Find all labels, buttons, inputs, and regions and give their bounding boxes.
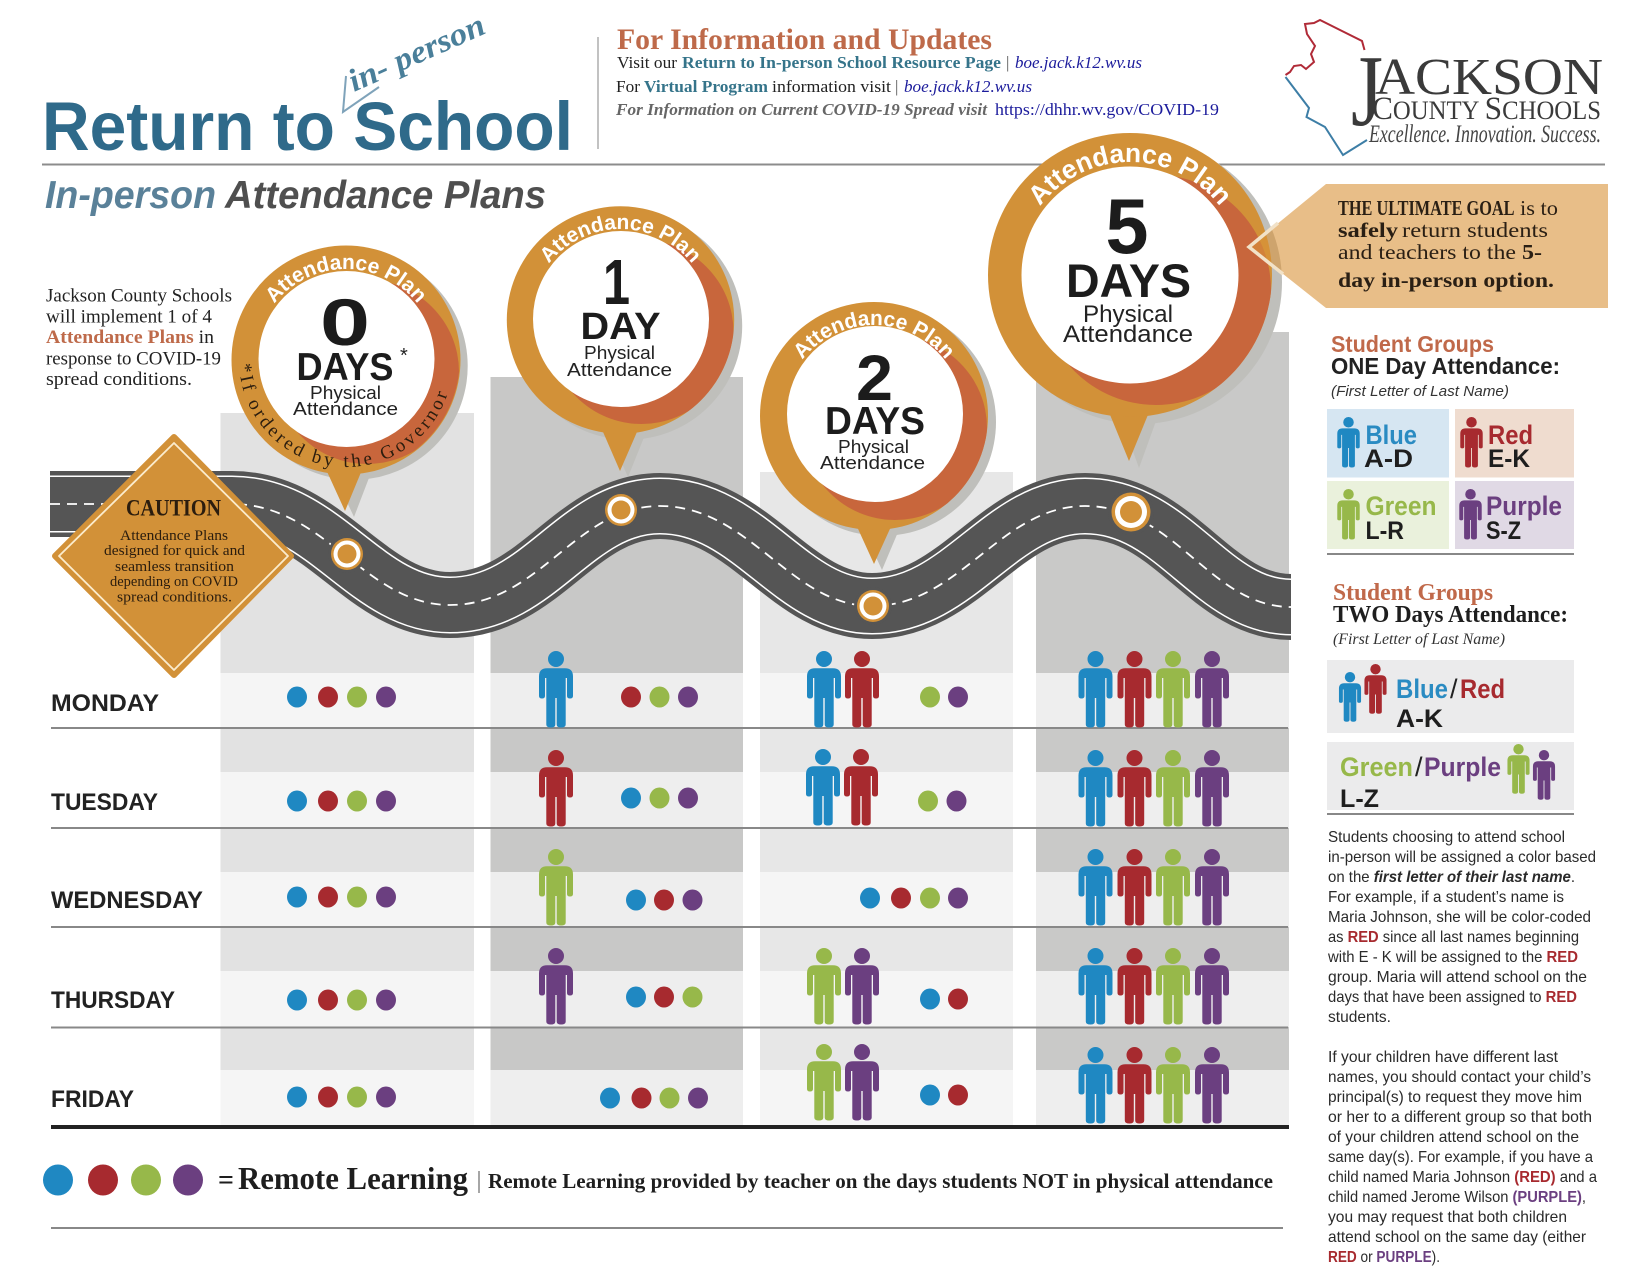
caution text: [104, 528, 246, 606]
info line: resource page: boe.jack.k12.wv.us: [1015, 53, 1142, 72]
plan pin: 0 days: DAYS: [296, 346, 394, 389]
plan pin: 0 days: Attendance: [293, 399, 398, 419]
day rules: [51, 728, 1289, 1127]
panel: student groups one day: [1327, 331, 1574, 549]
group: green and purple: Green: [1340, 752, 1413, 782]
group: green: Green: [1366, 491, 1436, 521]
ultimate goal callout: THE ULTIMATE GOAL: [1338, 196, 1514, 220]
group: purple: S-Z: [1486, 517, 1521, 545]
big number 2: 2: [856, 342, 893, 414]
plan pin: 1 day: [506, 206, 742, 477]
group: green and purple: /: [1415, 752, 1423, 782]
road marker: 5 days: [1108, 489, 1154, 535]
info line: covid spread: [615, 100, 1219, 119]
info line: covid spread: https://dhhr.wv.gov/COVID-19: [995, 100, 1219, 119]
explanatory text: color assignment: Maria Johnson, she will be color-coded: [1328, 909, 1591, 926]
plan pin: 5 days: Attendance: [1063, 321, 1193, 348]
day labels: TUESDAY: [51, 789, 158, 816]
county map outline: [1286, 20, 1364, 75]
day labels: [51, 690, 203, 1113]
explanatory text: different last names: RED or PURPLE).: [1328, 1249, 1440, 1266]
group: green: L-R: [1366, 517, 1404, 545]
subtitle: In-person Attendance Plans: [45, 174, 546, 217]
plan pin: 5 days: DAYS: [1066, 254, 1191, 307]
logo: Jackson County Schools: [1286, 20, 1603, 155]
group: blue: Blue: [1366, 420, 1417, 450]
group: blue and red: /: [1450, 674, 1458, 704]
plan pin: 1 day: DAY: [580, 306, 660, 348]
group: blue and red: Red: [1460, 674, 1505, 704]
explanatory text: color assignment: on the first letter of their last name.: [1328, 869, 1575, 886]
explanatory text: different last names: you may request that both children: [1328, 1209, 1567, 1226]
people: 5 days column: [1078, 651, 1229, 1124]
big number 0: 0: [320, 285, 370, 359]
ring label: Attendance Plan: [796, 312, 952, 360]
intro text: response to COVID-19: [46, 348, 221, 370]
info line: virtual program: [616, 77, 1032, 96]
ring note: governor order: *If ordered by the Governor: [240, 364, 447, 470]
road marker: 2 days: [854, 587, 892, 625]
day labels: THURSDAY: [51, 987, 175, 1014]
explanatory text: color assignment: as RED since all last names beginning: [1328, 929, 1579, 946]
caution text: spread conditions.: [117, 590, 232, 606]
explanatory text: different last names: or her to a different group so that both: [1328, 1109, 1592, 1126]
explanatory text: color assignment: students.: [1328, 1009, 1391, 1026]
panel: student groups two days: [1327, 580, 1574, 813]
subtitle: In-person Attendance Plans: In-person: [45, 174, 216, 217]
group: green: [1327, 481, 1449, 549]
people: 1 day column: [539, 651, 573, 1024]
group: blue and red: [1327, 660, 1574, 733]
explanatory text: color assignment: with E - K will be assigned to the RED: [1327, 949, 1578, 966]
intro text: spread conditions.: [46, 369, 192, 390]
caret mark: [343, 76, 379, 112]
plan pin: 1 day: Attendance: [567, 360, 672, 380]
heading: ONE Day Attendance:: [1331, 353, 1560, 379]
info line: resource page: Return to In-person School Resource Page: [682, 53, 1001, 72]
big number 5: 5: [1106, 182, 1148, 270]
caution heading: CAUTION: [126, 496, 221, 520]
plan pin: 1 day: Physical: [584, 342, 655, 363]
plan pin: 5 days: Physical: [1083, 301, 1173, 328]
plan pin: 2 days: Physical: [838, 436, 909, 457]
ultimate goal callout: return students: [1402, 218, 1548, 242]
group: purple: Purple: [1486, 491, 1562, 521]
day labels: MONDAY: [51, 690, 159, 717]
explanatory text: different last names: of your children attend school on the: [1328, 1129, 1579, 1146]
info line: resource page: Visit our: [617, 53, 677, 72]
info line: resource page: |: [1006, 53, 1009, 72]
column backgrounds: [220, 332, 1289, 1127]
plan pin: 0 days: Physical: [310, 382, 381, 403]
info line: virtual program: boe.jack.k12.wv.us: [904, 77, 1032, 96]
group: red: Red: [1488, 420, 1533, 450]
remote learning legend: Remote Learning: [238, 1160, 468, 1196]
ring label: Attendance Plan: [268, 256, 424, 304]
ultimate goal callout: day in-person option.: [1338, 268, 1554, 292]
info line: virtual program: For: [616, 77, 640, 96]
logo: Jackson County Schools: J: [1351, 35, 1383, 148]
info line: virtual program: |: [895, 77, 898, 96]
plan pin: 2 days: DAYS: [825, 400, 925, 443]
group: blue: A-D: [1364, 445, 1413, 473]
subtitle: In-person Attendance Plans: Attendance Plans: [224, 174, 546, 217]
explanatory text: color assignment: [1327, 829, 1596, 1026]
group: blue and red: Blue: [1396, 674, 1448, 704]
road marker: 1 day: [602, 491, 640, 529]
remote learning legend: Remote Learning provided by teacher on the days students NOT in physical attendance: [488, 1169, 1273, 1193]
explanatory text: different last names: If your children have different last: [1328, 1049, 1559, 1066]
remote dots: 2 days column: [860, 686, 968, 1106]
info line: virtual program: information visit: [772, 77, 891, 96]
big number 1: 1: [603, 246, 630, 318]
caution text: depending on COVID: [110, 574, 238, 590]
explanatory text: different last names: principal(s) to request they move him: [1328, 1089, 1582, 1106]
explanatory text: color assignment: days that have been assigned to RED: [1328, 989, 1577, 1006]
heading: Student Groups: [1333, 580, 1493, 606]
handwritten insert: in-person: in- person: [342, 6, 490, 98]
heading: [1331, 331, 1560, 400]
group: green and purple: Purple: [1424, 752, 1501, 782]
explanatory text: color assignment: group. Maria will attend school on the: [1328, 969, 1587, 986]
heading: TWO Days Attendance:: [1333, 602, 1568, 628]
explanatory text: different last names: [1328, 1049, 1597, 1266]
information and updates block: [615, 23, 1219, 119]
ultimate goal callout: is to: [1520, 196, 1558, 220]
remote learning legend: =: [218, 1165, 234, 1196]
intro text: will implement 1 of 4: [46, 306, 212, 328]
plan pin: 2 days: Attendance: [820, 453, 925, 473]
day labels: WEDNESDAY: [51, 887, 203, 914]
remote learning legend: [43, 1160, 1273, 1196]
explanatory text: color assignment: For example, if a student’s name is: [1328, 889, 1564, 906]
explanatory text: different last names: names, you should contact your child’s: [1328, 1069, 1591, 1086]
day labels: FRIDAY: [51, 1086, 134, 1113]
explanatory text: different last names: child named Jerome Wilson (PURPLE),: [1328, 1189, 1586, 1206]
group: red: [1455, 409, 1574, 478]
caution text: seamless transition: [115, 559, 235, 575]
group: red: E-K: [1488, 445, 1530, 473]
explanatory text: color assignment: in-person will be assigned a color based: [1328, 849, 1596, 866]
info line: resource page: [617, 53, 1142, 72]
heading: Student Groups: [1331, 331, 1494, 357]
title: Return to School: [42, 6, 573, 165]
ultimate goal callout: 5-: [1522, 240, 1542, 264]
explanatory text: color assignment: Students choosing to attend school: [1328, 829, 1565, 846]
info heading: For Information and Updates: [617, 23, 992, 56]
group: green and purple: L-Z: [1340, 785, 1379, 813]
logo: Jackson County Schools: COUNTY SCHOOLS: [1372, 91, 1601, 127]
info line: covid spread: For Information on Current COVID-19 Spread visit: [615, 100, 988, 119]
group: green and purple: [1327, 742, 1574, 813]
group: purple: [1455, 481, 1574, 549]
ultimate goal callout: [1249, 184, 1608, 308]
heading: (First Letter of Last Name): [1333, 631, 1505, 648]
ultimate goal callout: and teachers to the: [1338, 240, 1516, 264]
plan pin: 0 days: *: [400, 345, 408, 367]
group: blue: [1327, 409, 1449, 478]
caution text: designed for quick and: [104, 543, 246, 559]
explanatory text: different last names: attend school on the same day (either: [1328, 1229, 1587, 1246]
intro text: [46, 286, 232, 390]
logo: Jackson County Schools: ACKSON: [1375, 49, 1603, 106]
remote dots: 1 day column: [600, 686, 708, 1108]
heading: (First Letter of Last Name): [1331, 383, 1509, 400]
explanatory text: different last names: same day(s). For example, if you have a: [1328, 1149, 1593, 1166]
remote dots: 0 days column: [287, 686, 396, 1108]
ring label: Attendance Plan: [542, 216, 698, 264]
plan pin: 5 days: [988, 133, 1282, 467]
plan pin: 2 days: [760, 302, 996, 570]
ring label: Attendance Plan: [1031, 145, 1228, 206]
road: [50, 504, 1291, 607]
explanatory text: different last names: child named Maria Johnson (RED) and a: [1328, 1169, 1597, 1186]
heading: [1333, 580, 1568, 648]
caution text: Attendance Plans: [120, 528, 228, 544]
title: Return to School: Return to School: [42, 88, 573, 165]
intro text: Attendance Plans in: [46, 327, 215, 348]
plan pin: 0 days: [232, 246, 468, 517]
people: 2 days column: [806, 651, 879, 1120]
ultimate goal callout: safely: [1338, 218, 1399, 242]
info line: virtual program: Virtual Program: [644, 77, 768, 96]
caution sign: [55, 437, 291, 675]
group: blue and red: A-K: [1396, 705, 1443, 733]
road marker: 0 days: [328, 535, 366, 573]
intro text: Jackson County Schools: [46, 286, 232, 306]
